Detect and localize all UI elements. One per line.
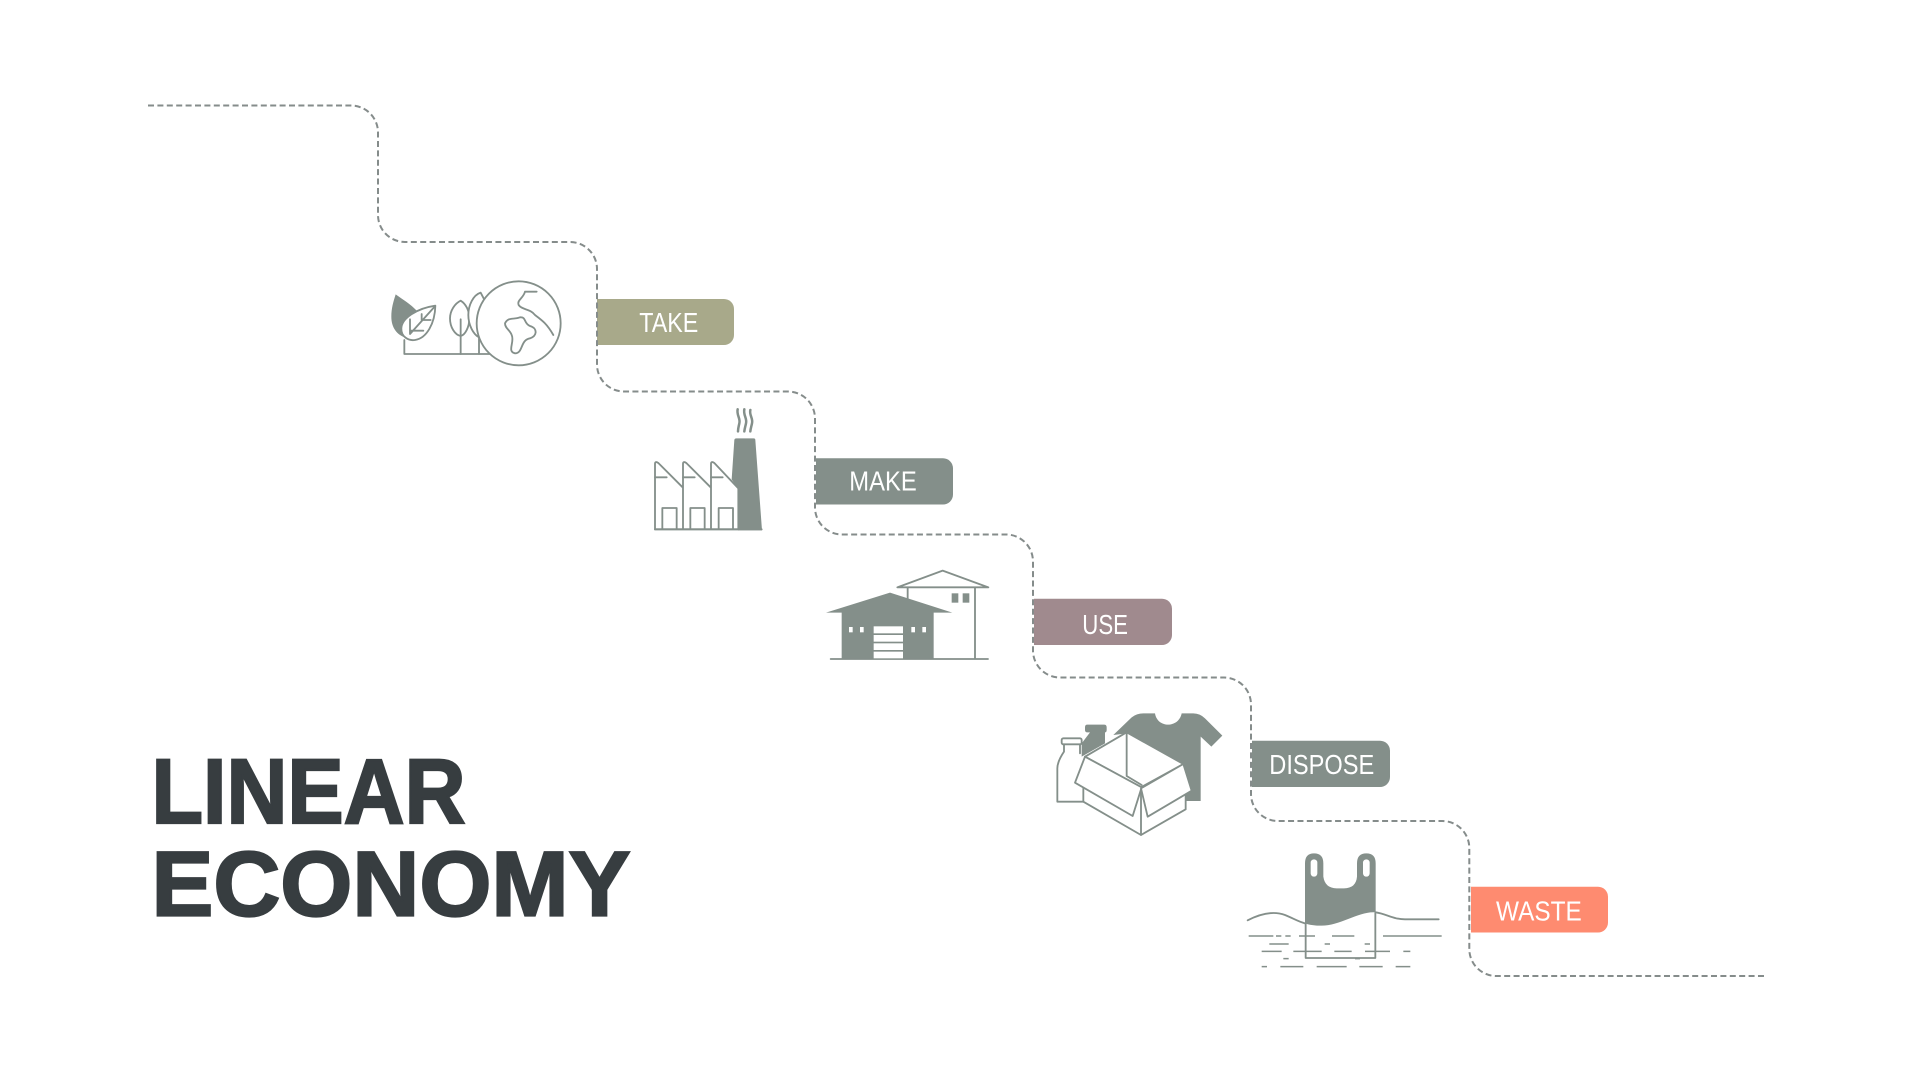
tag: TAKE: TAKE: [639, 307, 698, 338]
tag: DISPOSE: DISPOSE: [1269, 749, 1374, 780]
title: ECONOMY: [152, 834, 630, 936]
icon: plastic bag in water: [1248, 853, 1442, 967]
tag: WASTE: [1471, 887, 1608, 932]
tag: DISPOSE: [1252, 741, 1390, 787]
tag: TAKE: [597, 299, 734, 345]
icon: warehouse: [826, 571, 988, 659]
tag: USE: [1034, 599, 1172, 645]
tag: MAKE: [816, 458, 953, 504]
title: LINEAR: [152, 741, 466, 843]
tag: MAKE: MAKE: [849, 466, 917, 497]
icon: box with shirt and bottles: [1057, 713, 1222, 835]
title: [152, 741, 630, 936]
tag: USE: USE: [1082, 609, 1128, 640]
icon: factory with chimney: [655, 409, 762, 530]
dashed stepped path: [148, 106, 1767, 976]
icon: leaf, trees and globe: [391, 281, 561, 365]
tag: WASTE: WASTE: [1496, 896, 1582, 927]
